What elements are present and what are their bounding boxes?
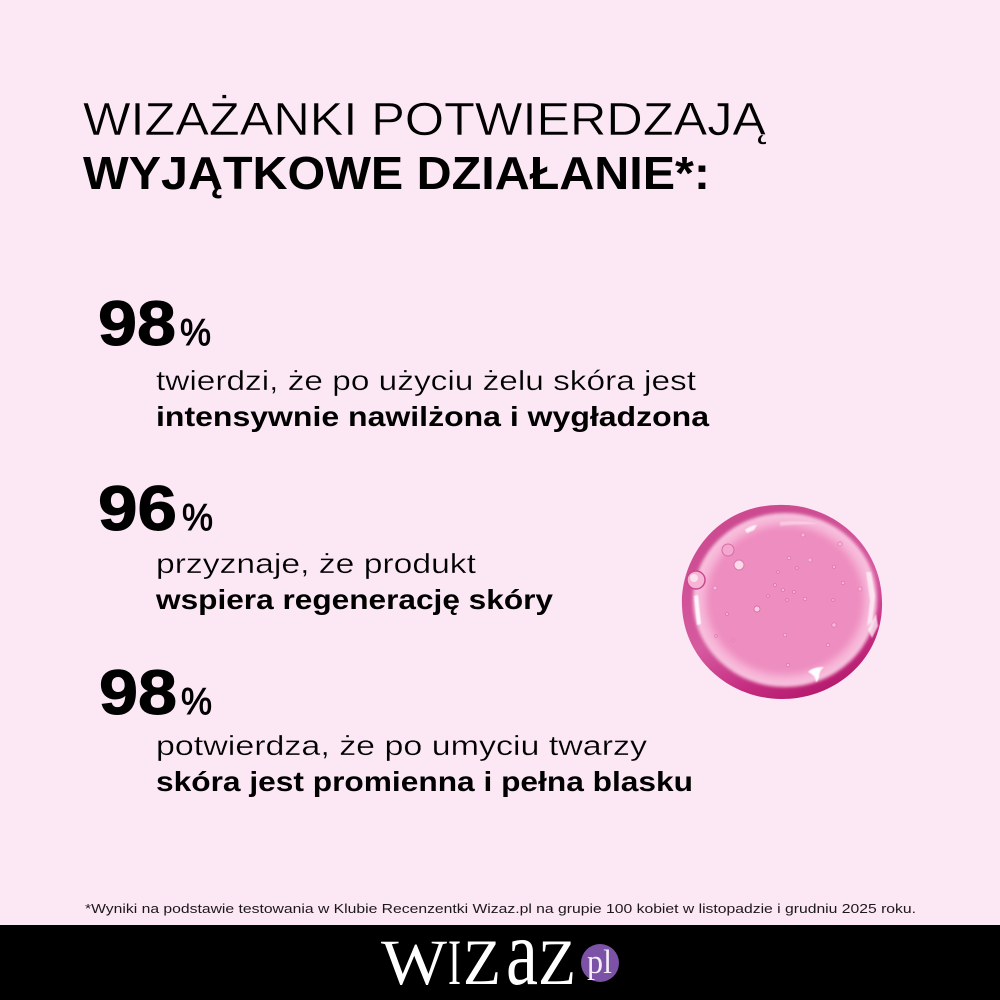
value: 96%: % bbox=[182, 497, 213, 539]
description 3: potwierdza, że po umyciu twarzy bbox=[156, 730, 647, 761]
description 2 bbox=[155, 548, 553, 615]
logo: wizaz.pl: Z bbox=[463, 927, 501, 999]
description 2: przyznaje, że produkt bbox=[156, 548, 476, 579]
droplet highlights bbox=[694, 521, 878, 682]
title bbox=[83, 93, 766, 199]
value: 98% bbox=[99, 658, 212, 728]
droplet outer rim bbox=[682, 505, 882, 699]
description 2: wspiera regenerację skóry bbox=[155, 584, 553, 615]
statistic 3 bbox=[99, 658, 693, 797]
logo badge: pl: pl bbox=[587, 944, 612, 981]
description 1: twierdzi, że po użyciu żelu skóra jest bbox=[156, 365, 696, 396]
description 3 bbox=[156, 730, 693, 797]
droplet small bubbles bbox=[713, 533, 862, 667]
droplet core tone bbox=[709, 528, 861, 672]
logo: wizaz.pl: Z bbox=[538, 927, 576, 999]
footnote: *Wyniki na podstawie testowania w Klubie Recenzentki Wizaz.pl na grupie 100 kobiet w listopadzie i grudniu 2025 roku. bbox=[85, 901, 916, 916]
value: 96% bbox=[98, 474, 213, 544]
logo: wizaz.pl: I bbox=[448, 927, 461, 999]
statistic 2 bbox=[98, 474, 553, 615]
value: 98% bbox=[98, 289, 211, 359]
logo: wizaz.pl bbox=[381, 901, 619, 1000]
title: WYJĄTKOWE DZIAŁANIE*: bbox=[83, 147, 710, 199]
droplet large bubbles bbox=[687, 544, 760, 612]
value: 98%: % bbox=[180, 312, 211, 354]
title: WIZAŻANKI POTWIERDZAJĄ bbox=[83, 93, 766, 145]
droplet inner body bbox=[693, 513, 877, 687]
gel droplet illustration bbox=[682, 505, 882, 699]
footer bar bbox=[0, 901, 1000, 1000]
statistic 1 bbox=[98, 289, 709, 432]
logo: wizaz.pl: W bbox=[381, 927, 448, 999]
description 3: skóra jest promienna i pełna blasku bbox=[156, 766, 693, 797]
value: 98%: 98 bbox=[99, 658, 177, 728]
description 1: intensywnie nawilżona i wygładzona bbox=[156, 401, 709, 432]
logo badge: pl bbox=[581, 944, 619, 982]
value: 98%: % bbox=[181, 681, 212, 723]
description 1 bbox=[156, 365, 709, 432]
value: 98%: 98 bbox=[98, 289, 176, 359]
value: 96%: 96 bbox=[98, 474, 177, 544]
